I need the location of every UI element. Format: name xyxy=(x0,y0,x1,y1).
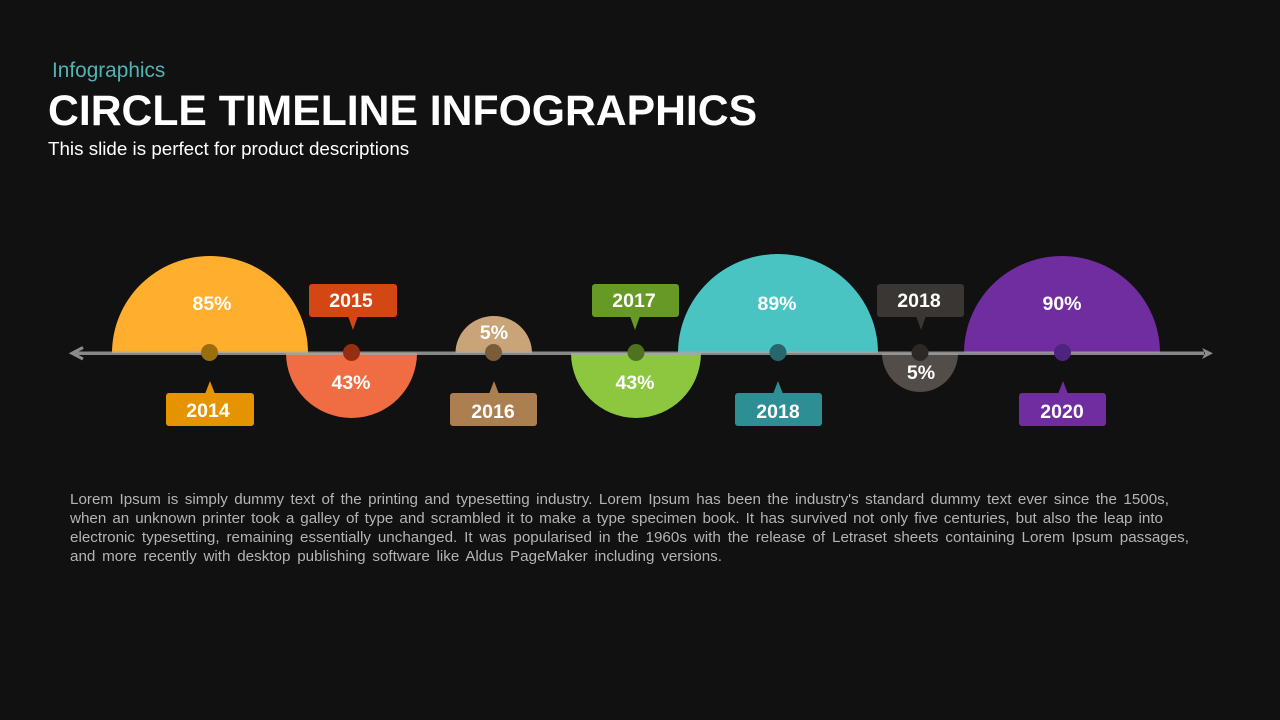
body text block: Lorem Ipsum is simply dummy text of the printing and typesetting industry. Lorem Ipsum has been the industry's standard dummy text ever since the 1500s, xyxy=(70,490,1169,508)
semicircle 2015: 43%: 43% xyxy=(331,372,371,394)
title: CIRCLE TIMELINE INFOGRAPHICS xyxy=(48,87,757,135)
label 2014 xyxy=(166,381,254,426)
marker dot 2015 xyxy=(343,344,360,361)
marker dot 2017 xyxy=(628,344,644,361)
label 2018 dark xyxy=(877,284,964,330)
semicircle 2016: 5%: 5% xyxy=(480,322,508,344)
label 2018 dark: 2018 xyxy=(897,290,941,312)
label 2015: 2015 xyxy=(329,290,373,312)
marker dot 2014 xyxy=(201,344,218,361)
marker dot 2016 xyxy=(485,344,502,361)
semicircle 2018: 5%: 5% xyxy=(907,362,935,384)
label 2014: 2014 xyxy=(186,400,230,422)
label 2017 xyxy=(592,284,679,330)
body text block xyxy=(70,490,1189,564)
label 2020: 2020 xyxy=(1040,401,1084,423)
subtitle: This slide is perfect for product descriptions xyxy=(48,138,409,159)
eyebrow: Infographics: Infographics xyxy=(52,59,165,82)
semicircle 2017: 43% xyxy=(571,353,701,418)
semicircle 2018: 5% xyxy=(882,353,958,392)
label 2015 xyxy=(309,284,397,330)
marker dot 2020 xyxy=(1054,344,1071,361)
semicircle 2020: 90% xyxy=(964,256,1160,353)
label 2018 xyxy=(735,381,822,426)
semicircle 2016: 5% xyxy=(456,316,532,353)
marker dot 2018 dark xyxy=(912,344,928,361)
body text block: when an unknown printer took a galley of type and scrambled it to make a type specimen book. It has survived not only five centuries, but also the leap into xyxy=(70,510,1163,526)
semicircle 2014: 85%: 85% xyxy=(192,293,232,315)
timeline axis with arrows xyxy=(72,348,1213,359)
label 2016 xyxy=(450,381,537,426)
semicircle 2017: 43%: 43% xyxy=(615,372,655,394)
label 2016: 2016 xyxy=(471,401,515,423)
semicircle 2018: 89% xyxy=(678,254,878,353)
body text block: electronic typesetting, remaining essentially unchanged. It was popularised in the 1960s with the release of Letraset sheets containing Lorem Ipsum passages, xyxy=(70,528,1189,546)
label 2018: 2018 xyxy=(756,401,800,423)
semicircle 2015: 43% xyxy=(286,353,417,418)
label 2017: 2017 xyxy=(612,290,656,312)
body text block: and more recently with desktop publishing software like Aldus PageMaker including versions. xyxy=(70,548,722,564)
marker dot 2018 xyxy=(770,344,786,361)
semicircle 2018: 89%: 89% xyxy=(757,293,797,315)
semicircle 2014: 85% xyxy=(112,256,308,353)
label 2020 xyxy=(1019,381,1106,426)
semicircle 2020: 90%: 90% xyxy=(1042,293,1082,315)
